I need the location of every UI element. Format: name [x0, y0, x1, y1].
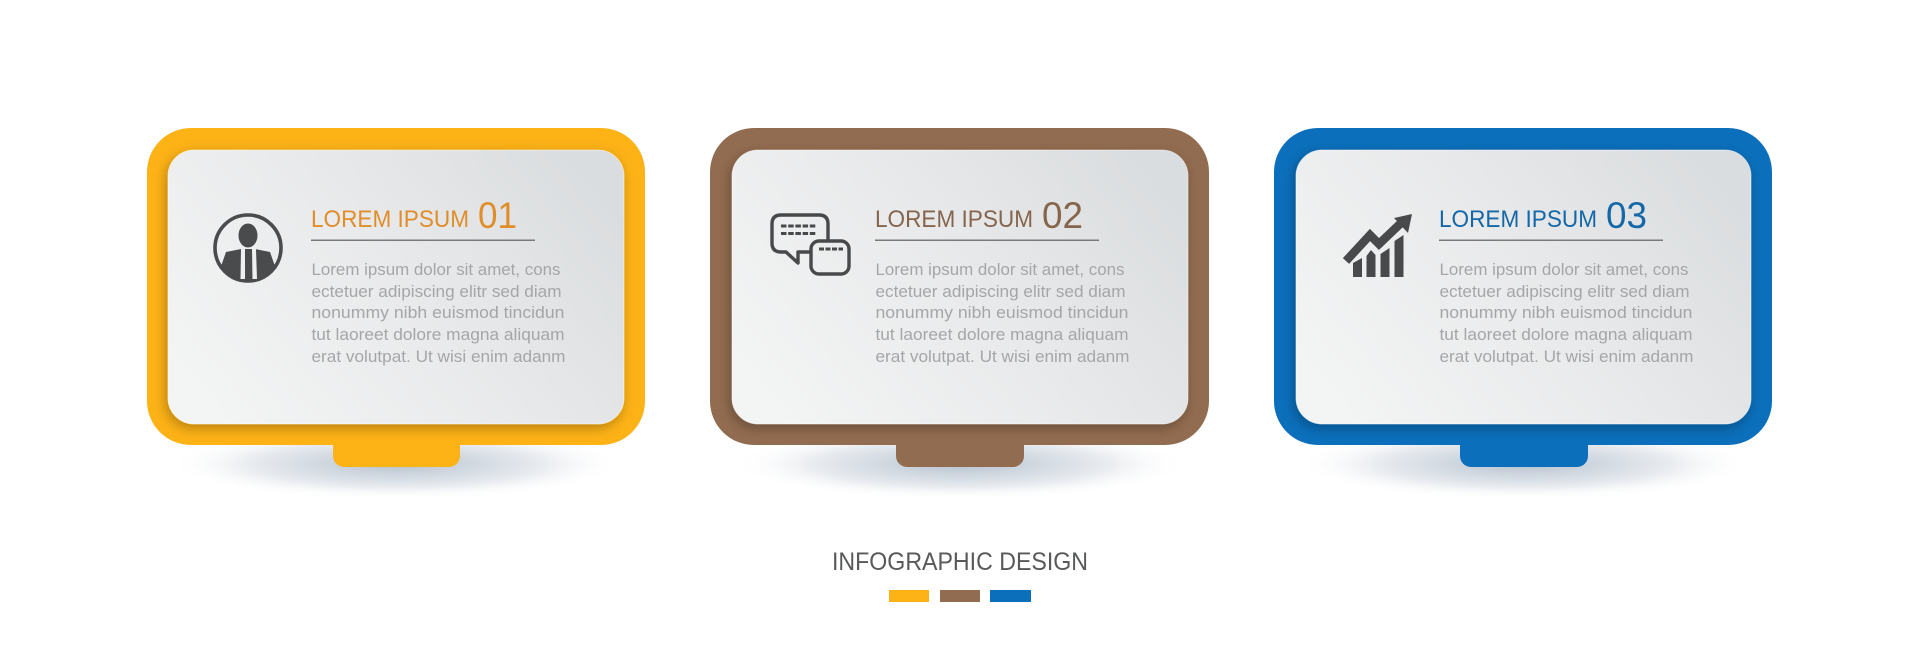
body text: tut laoreet dolore magna aliquam	[1440, 325, 1692, 344]
panel: 03 blue	[1274, 128, 1772, 500]
body text: nonummy nibh euismod tincidun	[312, 303, 564, 322]
body text: nonummy nibh euismod tincidun	[1440, 303, 1692, 322]
tab	[1460, 430, 1588, 467]
icon: chat bubbles	[772, 215, 849, 274]
ground shadow	[732, 428, 1188, 500]
heading: LOREM IPSUM	[311, 206, 469, 233]
divider	[1439, 240, 1663, 241]
tab	[333, 430, 460, 467]
body text	[312, 260, 566, 366]
inner card	[1296, 150, 1751, 424]
icon: businessman	[215, 215, 281, 285]
inner card	[168, 150, 624, 424]
number: 01	[478, 195, 517, 236]
body text: erat volutpat. Ut wisi enim adanm	[876, 347, 1130, 366]
number: 03	[1606, 195, 1647, 236]
number: 02	[1042, 195, 1083, 236]
outer frame	[147, 128, 645, 445]
body text: ectetuer adipiscing elitr sed diam	[1440, 282, 1690, 301]
icon: growth chart	[1346, 214, 1412, 277]
tab	[896, 430, 1024, 467]
outer frame	[1274, 128, 1772, 445]
heading: LOREM IPSUM	[875, 206, 1033, 233]
body text	[1440, 260, 1694, 366]
body text: Lorem ipsum dolor sit amet, cons	[876, 260, 1124, 279]
body text: erat volutpat. Ut wisi enim adanm	[1440, 347, 1694, 366]
outer frame	[710, 128, 1209, 445]
heading: LOREM IPSUM	[1439, 206, 1597, 233]
colour legend	[889, 590, 1031, 602]
ground shadow	[1296, 428, 1752, 500]
ground shadow	[168, 428, 624, 500]
inner card	[732, 150, 1188, 424]
divider	[311, 240, 535, 241]
body text: nonummy nibh euismod tincidun	[876, 303, 1128, 322]
divider	[875, 240, 1099, 241]
body text: Lorem ipsum dolor sit amet, cons	[1440, 260, 1688, 279]
body text: Lorem ipsum dolor sit amet, cons	[312, 260, 560, 279]
body text: ectetuer adipiscing elitr sed diam	[312, 282, 562, 301]
body text: ectetuer adipiscing elitr sed diam	[876, 282, 1126, 301]
body text: tut laoreet dolore magna aliquam	[312, 325, 564, 344]
panel: 01 yellow	[147, 128, 645, 500]
body text: erat volutpat. Ut wisi enim adanm	[312, 347, 566, 366]
body text	[876, 260, 1130, 366]
panel: 02 brown	[710, 128, 1209, 500]
title: INFOGRAPHIC DESIGN	[832, 548, 1088, 576]
body text: tut laoreet dolore magna aliquam	[876, 325, 1128, 344]
